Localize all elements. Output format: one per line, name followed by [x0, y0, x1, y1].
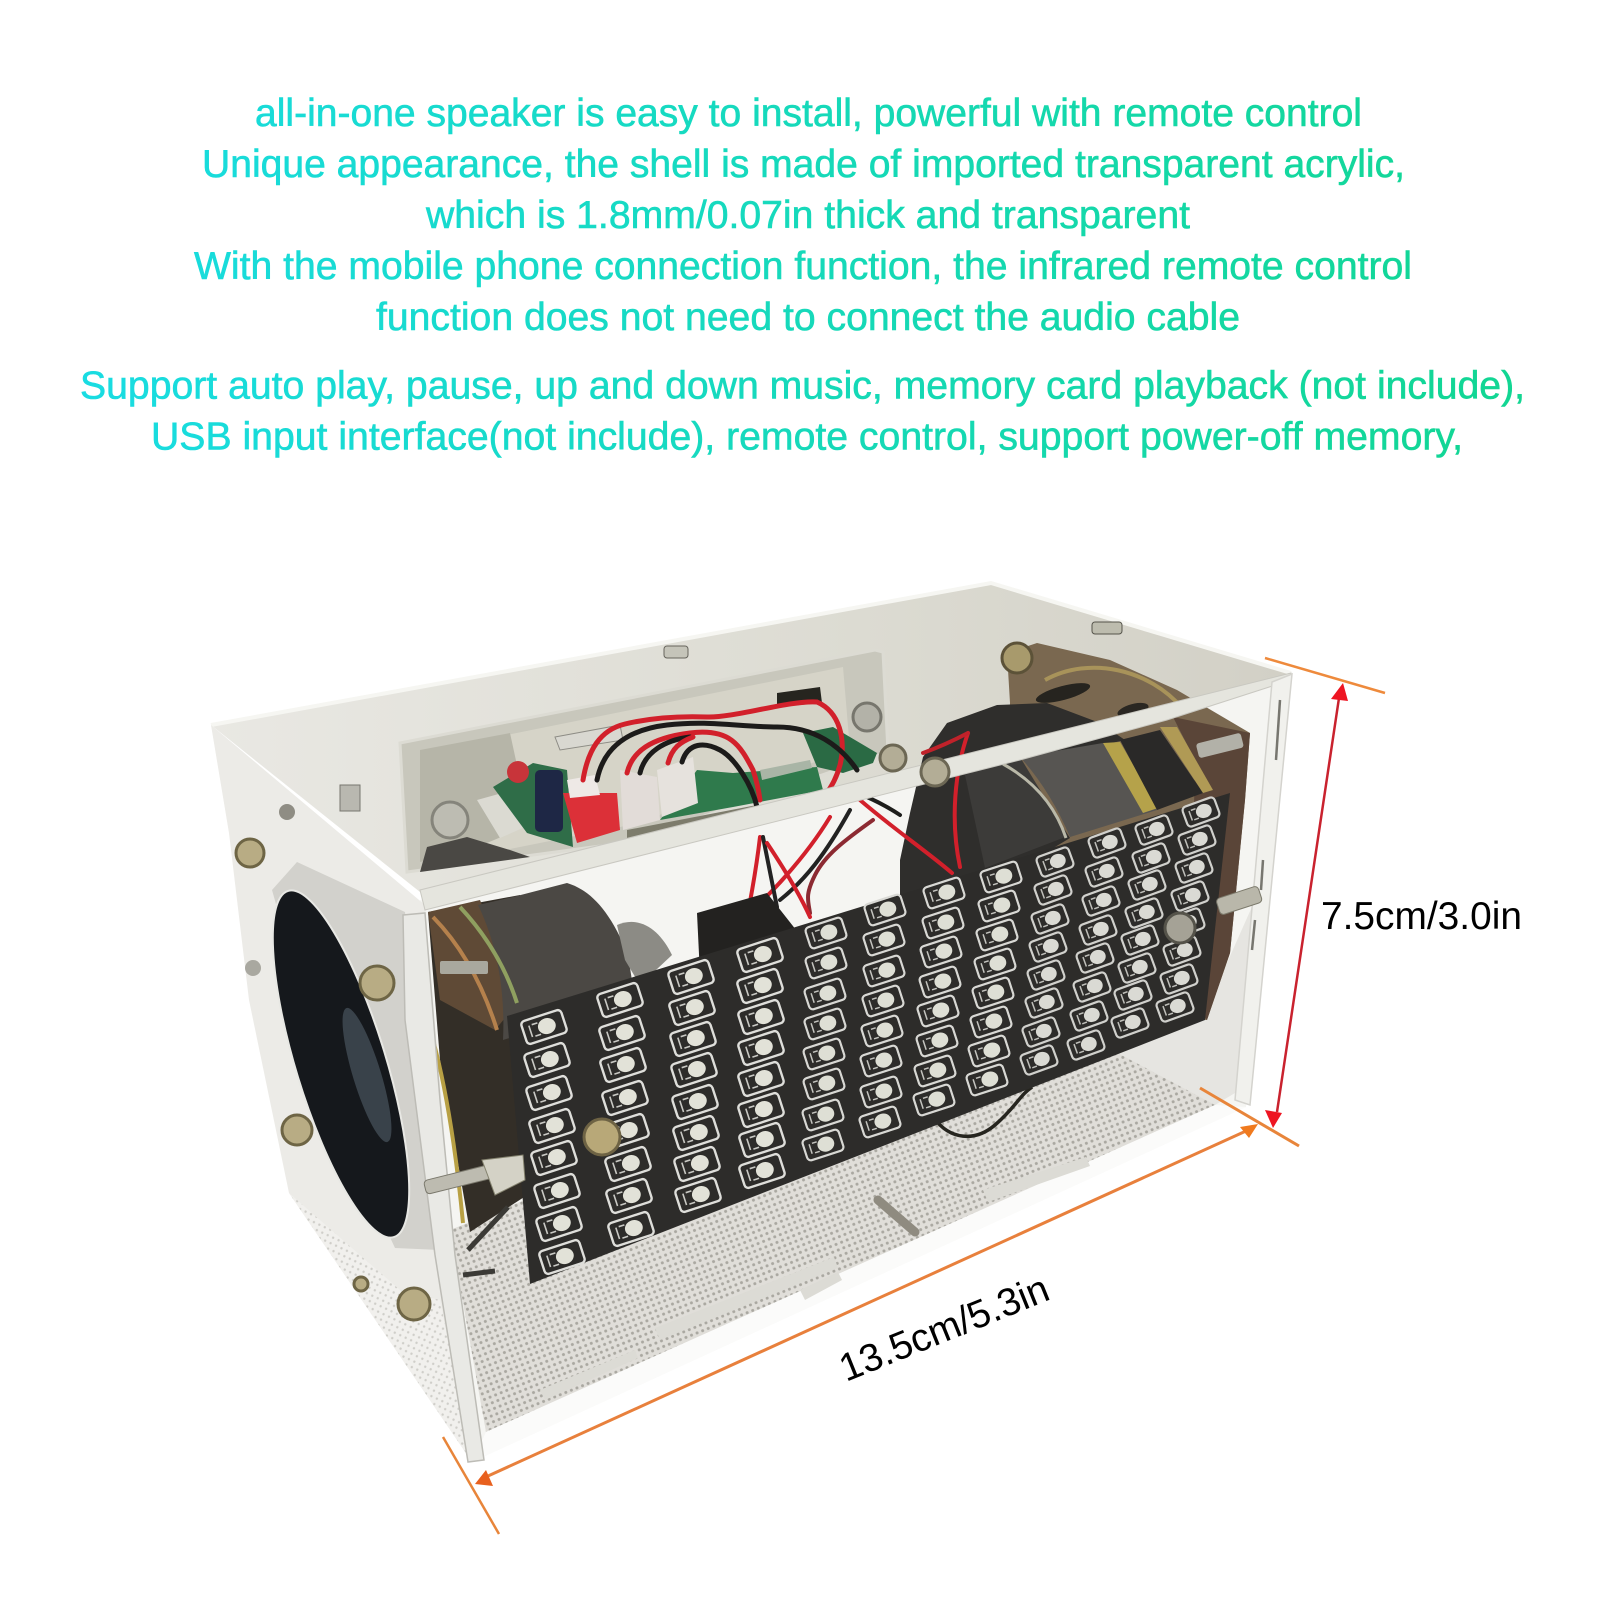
green circuit board: middle piece — [660, 767, 823, 820]
line 5: function does not need to connect the audio cable — [376, 296, 1240, 339]
left speaker bolt thread — [440, 961, 488, 974]
small clip left — [340, 785, 360, 811]
top edge highlight — [211, 583, 1291, 725]
left speaker dark disc — [428, 895, 535, 1232]
right speaker grey section — [1020, 743, 1157, 837]
rail screws — [880, 745, 949, 786]
left speaker magnet — [478, 883, 635, 1040]
right-hand screw on back panel — [853, 703, 881, 731]
line 1: all-in-one speaker is easy to install, powerful with remote control — [255, 92, 1362, 135]
line 6: Support auto play, pause, up and down music, memory card playback (not include), — [80, 364, 1525, 408]
red arrow head bottom — [1265, 1110, 1282, 1128]
bottom right tick — [1200, 1088, 1299, 1146]
top front rail — [420, 673, 1291, 910]
small grey screw — [245, 960, 261, 976]
top clip right — [1092, 622, 1122, 634]
right acrylic edge strip — [1235, 674, 1292, 1105]
line 3: which is 1.8mm/0.07in thick and transparent — [425, 194, 1190, 237]
recess screw — [432, 802, 468, 838]
acrylic bottom tabs — [540, 1157, 1090, 1400]
right speaker black cylinder — [900, 703, 1125, 900]
rear metal recess — [400, 650, 888, 872]
basket slit — [1034, 679, 1092, 707]
right speaker black ring — [1120, 730, 1203, 810]
white bracket — [477, 788, 530, 838]
top acrylic panel — [211, 583, 1291, 892]
wiring above rail — [583, 702, 857, 807]
right strip dark marks — [1252, 700, 1280, 950]
shaded recess left — [420, 733, 530, 862]
right speaker bolt — [1196, 733, 1244, 758]
left clamp bracket — [482, 1155, 525, 1195]
wiring below rail — [720, 733, 968, 937]
top clip middle — [664, 646, 688, 658]
height label: 7.5cm/3.0in — [1321, 895, 1522, 938]
line 7: USB input interface(not include), remote control, support power-off memory, — [151, 416, 1463, 458]
white front bottom band — [472, 1105, 1246, 1462]
right speaker basket top — [1000, 643, 1250, 1020]
white connector head — [567, 775, 600, 798]
red connector — [563, 793, 620, 843]
dimension: length — [443, 1088, 1299, 1534]
text block: feature description — [80, 92, 1525, 458]
interior of box seen through the front — [420, 675, 1291, 1462]
orange arrow head right — [1240, 1124, 1258, 1138]
left speaker brown upper — [428, 900, 520, 1030]
silver arc line — [1003, 764, 1066, 838]
basket gold arc — [1045, 668, 1182, 708]
green circuit board: left piece — [493, 763, 573, 847]
right side clamp screw — [1216, 886, 1263, 915]
card slot — [555, 725, 623, 750]
white connector one — [620, 770, 660, 830]
orange arrow head left — [475, 1470, 493, 1486]
red height arrow shaft — [1277, 698, 1339, 1112]
black plug behind LED panel — [697, 893, 800, 975]
right speaker basket side shade — [1173, 717, 1250, 1020]
left end panel dotted lower part — [289, 1193, 472, 1462]
LED matrix — [520, 796, 1221, 1275]
board underside strip — [627, 805, 757, 842]
magnet seen above rail — [420, 837, 530, 872]
line 4: With the mobile phone connection function, the infrared remote control — [194, 245, 1412, 288]
striped back-right floor area — [1112, 900, 1255, 1105]
perforated floor — [450, 1010, 1215, 1432]
cone inner highlight — [333, 1004, 401, 1146]
right speaker outer gold ring — [1160, 727, 1213, 793]
standoff bolt on floor — [878, 1200, 915, 1232]
right speaker frame screw — [1002, 643, 1032, 673]
board pin header — [760, 760, 812, 780]
front left vertical strip — [403, 913, 484, 1462]
LED panel — [507, 793, 1230, 1284]
inner cylinder shade — [965, 757, 1068, 868]
red small switch — [507, 761, 529, 783]
orange length arrow shaft — [488, 1131, 1246, 1476]
silver speaker plate on left end panel — [272, 862, 440, 1250]
left bottom tick — [443, 1437, 499, 1534]
left clamp rod — [423, 1163, 497, 1195]
recess inner — [455, 667, 850, 860]
green circuit board: right piece — [803, 727, 877, 773]
white connector two — [657, 757, 698, 817]
left end panel screws — [236, 839, 430, 1320]
product illustration: transparent acrylic speaker box — [211, 583, 1292, 1462]
panel screw right — [1165, 913, 1195, 943]
left speaker rear bell — [617, 922, 672, 985]
black component on board — [777, 687, 822, 707]
left speaker cone opening — [245, 878, 437, 1250]
left end panel — [211, 725, 472, 1462]
line 2: Unique appearance, the shell is made of imported transparent acrylic, — [202, 143, 1405, 186]
length label: 13.5cm/5.3in — [833, 1267, 1055, 1390]
red arrow head top — [1331, 683, 1348, 701]
capacitor — [535, 770, 563, 832]
basket hole — [1116, 700, 1150, 720]
left speaker gold arcs — [433, 907, 517, 1223]
gold panel screw left — [584, 1119, 620, 1155]
wires lower left — [463, 1207, 508, 1275]
top tick — [1265, 658, 1385, 693]
right speaker gold strip — [1103, 742, 1158, 813]
black cable under LED panel — [934, 1087, 1032, 1136]
LED panel board — [507, 793, 1230, 1284]
dimension: height — [1265, 658, 1522, 1128]
small top screw left — [279, 804, 295, 820]
